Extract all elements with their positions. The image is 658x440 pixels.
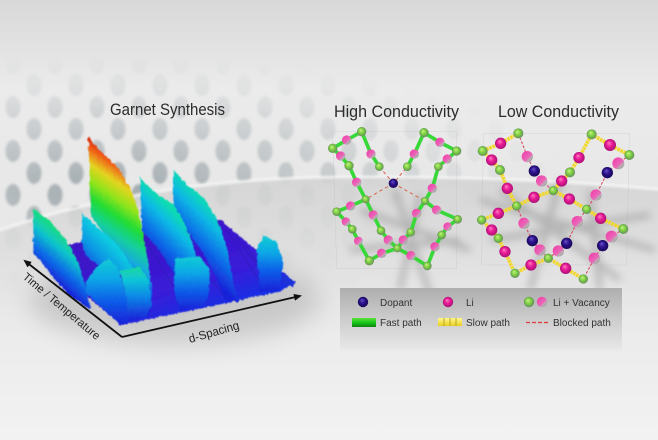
peak: mid left low bbox=[82, 213, 133, 277]
peak: back left bbox=[33, 208, 91, 310]
legend: Dopant: Dopant bbox=[380, 298, 412, 309]
legend: Li + Vacancy: Li + Vacancy bbox=[553, 298, 610, 309]
title: Low Conductivity: Low Conductivity bbox=[498, 102, 619, 121]
legend: Fast path bbox=[352, 318, 422, 329]
peak: front centre right bbox=[174, 257, 210, 311]
vacancy nodes bbox=[518, 151, 624, 264]
peak: centre tall bbox=[140, 177, 204, 307]
peak: tallest bbox=[88, 137, 153, 317]
axis label: d-Spacing: d-Spacing bbox=[187, 318, 241, 346]
blocked paths to dopant bbox=[366, 167, 425, 201]
molecule shadows bbox=[350, 180, 655, 295]
legend: Slow path bbox=[438, 318, 510, 329]
peak: far right small bbox=[257, 236, 283, 292]
peak: front small centre bbox=[119, 267, 152, 321]
dopant bbox=[389, 179, 398, 188]
blocked paths bbox=[517, 133, 629, 279]
axis arrows bbox=[25, 261, 300, 337]
chart floor bbox=[33, 220, 295, 325]
axis label: Time / Temperature: Time / Temperature bbox=[20, 271, 102, 343]
legend: Li + Vacancy bbox=[524, 297, 610, 309]
diagram: low conductivity structure bbox=[477, 128, 634, 284]
Li + vacancy green nodes bbox=[477, 128, 634, 284]
floor streaks bbox=[143, 230, 273, 300]
legend: Blocked path bbox=[526, 318, 611, 329]
Li nodes bbox=[486, 138, 616, 274]
title: Garnet Synthesis: Garnet Synthesis bbox=[110, 100, 225, 119]
peak: far right tall bbox=[173, 170, 239, 301]
legend: Blocked path: Blocked path bbox=[553, 318, 611, 329]
fast paths bbox=[333, 132, 458, 266]
legend: Slow path: Slow path bbox=[466, 318, 510, 329]
Li + vacancy pink nodes bbox=[336, 135, 452, 260]
legend panel bbox=[340, 288, 622, 350]
legend: Li: Li bbox=[466, 298, 474, 309]
title: High Conductivity: High Conductivity bbox=[334, 102, 459, 121]
legend: Fast path: Fast path bbox=[380, 318, 422, 329]
diagram: high conductivity structure bbox=[328, 127, 462, 270]
peak tail bbox=[282, 275, 295, 287]
legend: Li bbox=[443, 297, 474, 309]
chart: 3D diffraction waterfall bbox=[33, 137, 295, 325]
dopant nodes bbox=[527, 165, 613, 251]
slow paths bbox=[482, 133, 629, 279]
Li + vacancy green nodes bbox=[328, 127, 462, 270]
peak: front small left bbox=[86, 258, 129, 325]
legend: Dopant bbox=[358, 297, 412, 309]
